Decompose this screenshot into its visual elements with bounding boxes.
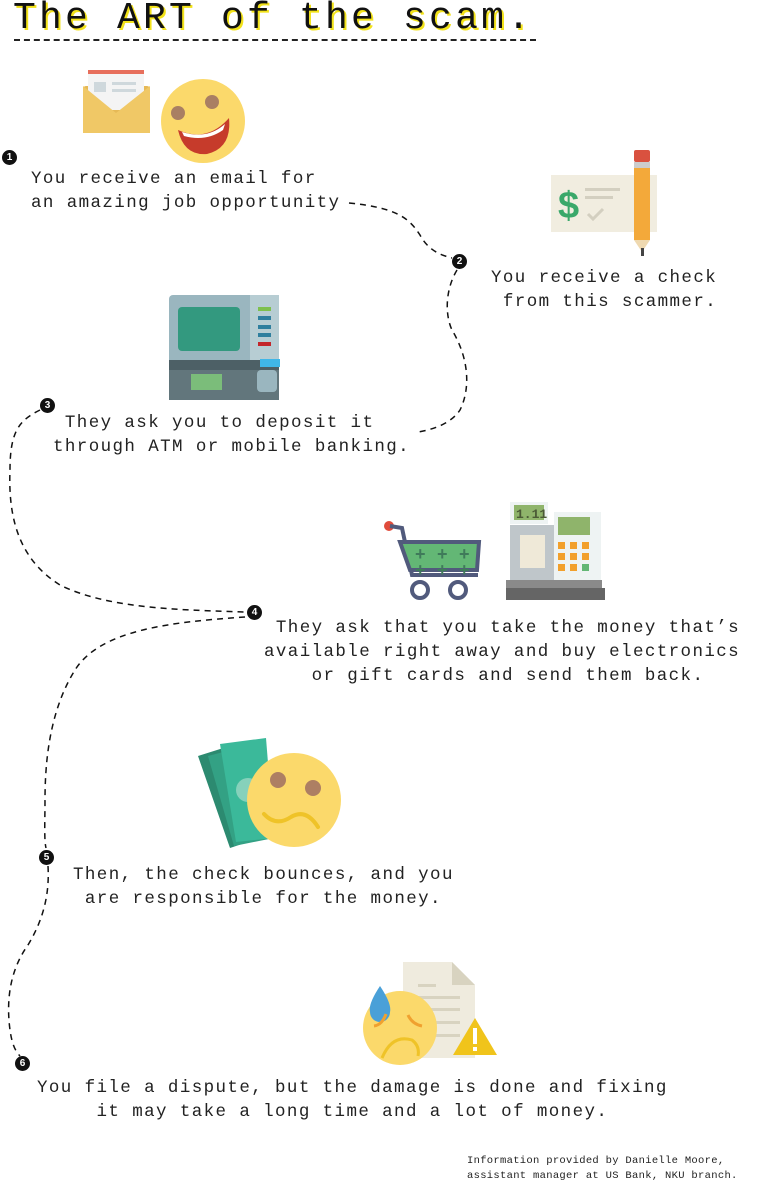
icon: shopping cart and cash register: + [459,560,470,580]
badge 4: 4 [252,607,257,618]
icon: email and grinning face [83,70,245,163]
icon: ATM [169,295,280,400]
text 2: You receive a check from this scammer. [491,268,717,312]
icon: shopping cart and cash register: + [437,560,448,580]
badge 2: 2 [457,256,462,267]
icon: check and pencil: $ [558,185,579,227]
badge 3: 3 [45,400,50,411]
badge 4 [247,605,262,620]
icon: shopping cart and cash register: + [437,544,448,564]
text 5: Then, the check bounces, and you are responsible for the money. [73,865,454,909]
text 1: You receive an email for an amazing job opportunity [31,169,340,213]
badge 2 [452,254,467,269]
icon: shopping cart and cash register: + [459,544,470,564]
text 6: You file a dispute, but the damage is done and fixing it may take a long time and a lot of money. [37,1078,668,1122]
icon: crying face with document and warning [363,962,497,1065]
icon: money and worried face [198,738,341,848]
title: The ART of the scam. [15,0,535,42]
icon: check and pencil [551,150,657,256]
badge 3 [40,398,55,413]
badge 1: 1 [7,152,12,163]
footer credit: Information provided by Danielle Moore, assistant manager at US Bank, NKU branch. [467,1155,738,1182]
badge 6: 6 [20,1058,25,1069]
text 4: They ask that you take the money that’s available right away and buy electronics or gift cards and send them back. [264,618,740,686]
icon: shopping cart and cash register [384,502,605,600]
icon: shopping cart and cash register: 1.11 [516,507,547,522]
badge 5 [39,850,54,865]
badge 1 [2,150,17,165]
badge 6 [15,1056,30,1071]
icon: shopping cart and cash register: + [415,544,426,564]
icon: shopping cart and cash register: + [415,560,426,580]
badge 5: 5 [44,852,49,863]
text 3: They ask you to deposit it through ATM or mobile banking. [53,413,410,457]
